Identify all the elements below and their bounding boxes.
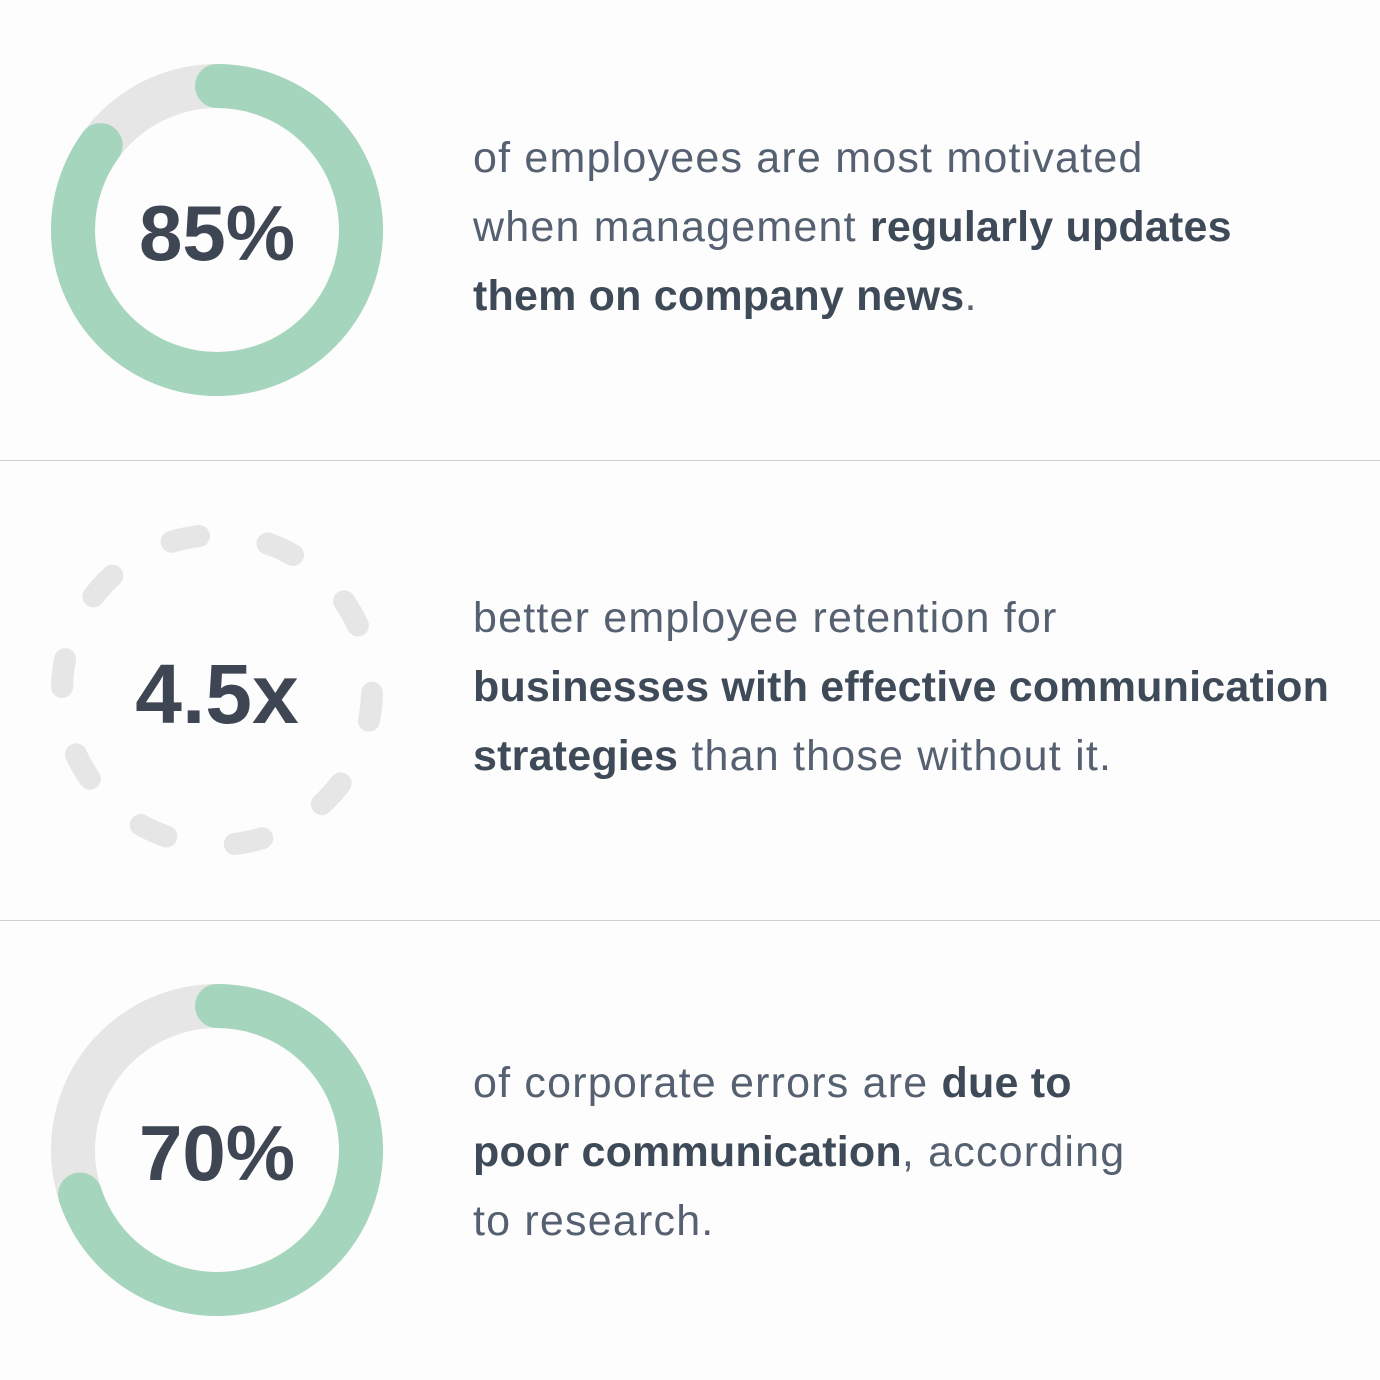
text block: stat 3: to research. [473, 1197, 714, 1245]
text block: stat 3: poor communication, according [473, 1128, 1125, 1176]
ring chart: 85%: 85% [139, 189, 295, 277]
dashed ring: 4.5x [51, 525, 383, 855]
text block: stat 2: businesses with effective communication [473, 663, 1329, 711]
text block: stat 1 [473, 134, 1232, 320]
dashed ring: 4.5x: 4.5x [135, 647, 299, 741]
text block: stat 1: of employees are most motivated [473, 134, 1144, 182]
text block: stat 3: of corporate errors are due to [473, 1059, 1072, 1107]
text block: stat 1: them on company news. [473, 272, 978, 320]
text block: stat 3 [473, 1059, 1125, 1245]
text block: stat 2: better employee retention for [473, 594, 1058, 642]
ring chart: 85% [51, 64, 383, 396]
ring chart: 70%: 70% [139, 1109, 295, 1197]
text block: stat 2 [473, 594, 1329, 780]
ring chart: 70% [51, 984, 383, 1316]
text block: stat 2: strategies than those without it. [473, 732, 1112, 780]
text block: stat 1: when management regularly updates [473, 203, 1232, 251]
